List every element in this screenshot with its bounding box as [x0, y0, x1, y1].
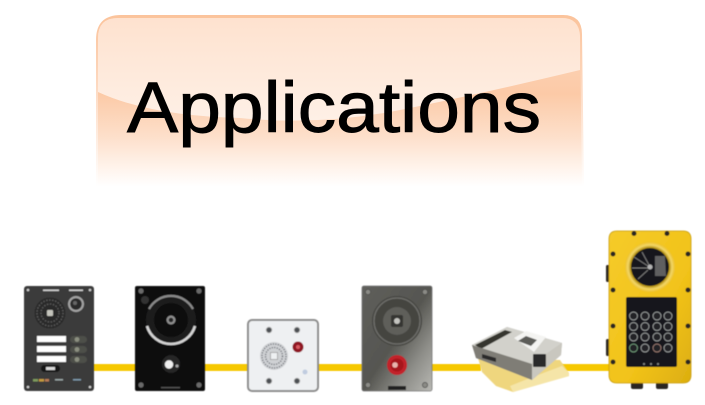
- device: white square intercom: [248, 320, 318, 391]
- network port: [533, 354, 546, 367]
- card reader slot: [41, 365, 60, 372]
- yellow connecting line: [93, 364, 611, 371]
- red call button: [292, 342, 304, 352]
- cable glands: [606, 265, 668, 389]
- speaker ring: [146, 295, 196, 345]
- name tag labels: [37, 336, 66, 362]
- banner: applications heading panel: [96, 15, 584, 187]
- device: black intercom with chrome speaker: [135, 286, 205, 391]
- yellow base: [478, 358, 569, 392]
- camera: [68, 296, 84, 312]
- device: stainless steel intercom with red button: [362, 286, 432, 391]
- keypad: [626, 297, 677, 367]
- speaker grille: [34, 298, 66, 328]
- status indicators: [33, 379, 81, 382]
- device: yellow rugged telephone: [606, 231, 691, 389]
- device: translucent interface module: [472, 327, 569, 392]
- housing: [472, 327, 562, 380]
- red call button: [387, 355, 407, 375]
- bolts: [610, 231, 690, 364]
- speaker grille: [260, 342, 288, 370]
- title: Applications: [127, 69, 541, 148]
- call button: [162, 355, 180, 373]
- horn speaker: [625, 242, 675, 292]
- call buttons: [70, 336, 87, 363]
- indicator: [302, 370, 308, 374]
- device: dark door intercom with name tags: [24, 286, 94, 391]
- speaker ring: [372, 296, 422, 346]
